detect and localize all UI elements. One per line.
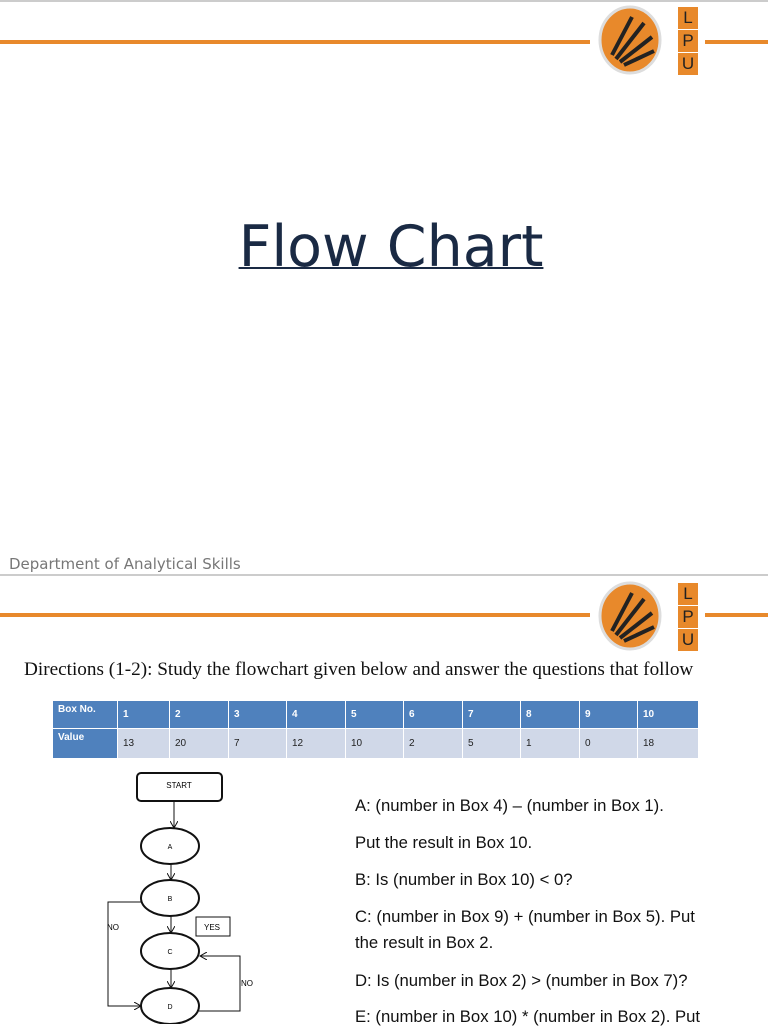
logo: P bbox=[682, 31, 694, 50]
data table: 10 bbox=[643, 709, 654, 720]
data table: 9 bbox=[585, 709, 591, 720]
logo: L bbox=[683, 584, 693, 603]
logo bbox=[598, 6, 698, 75]
flowchart: START bbox=[166, 781, 192, 790]
data table: Value bbox=[58, 732, 84, 743]
data table: 7 bbox=[468, 709, 474, 720]
data table: 18 bbox=[643, 738, 654, 749]
flowchart: B bbox=[168, 896, 173, 903]
data table: 13 bbox=[123, 738, 134, 749]
footer: Department of Analytical Skills bbox=[9, 555, 241, 573]
text: Put the result in Box 10. bbox=[355, 833, 532, 852]
data table: 10 bbox=[351, 738, 362, 749]
logo: U bbox=[682, 54, 694, 73]
data table: 1 bbox=[123, 709, 129, 720]
flowchart: D bbox=[167, 1004, 173, 1011]
data table: 8 bbox=[526, 709, 532, 720]
logo: P bbox=[682, 607, 694, 626]
data table: 12 bbox=[292, 738, 303, 749]
text: B: Is (number in Box 10) < 0? bbox=[355, 870, 573, 889]
logo: L bbox=[683, 8, 693, 27]
text: E: (number in Box 10) * (number in Box 2). Put bbox=[355, 1007, 700, 1026]
directions: Directions (1-2): Study the flowchart given below and answer the questions that follow bbox=[24, 659, 693, 680]
logo bbox=[598, 582, 698, 651]
data table: 0 bbox=[585, 738, 591, 749]
data table: 2 bbox=[409, 738, 415, 749]
flowchart: NO bbox=[107, 923, 119, 932]
text: C: (number in Box 9) + (number in Box 5). Put bbox=[355, 907, 695, 926]
text: A: (number in Box 4) – (number in Box 1). bbox=[355, 796, 664, 815]
flowchart: C bbox=[167, 949, 173, 956]
header line bbox=[0, 613, 590, 617]
title: Flow Chart bbox=[239, 214, 543, 280]
slide 2 bbox=[0, 574, 768, 1026]
flowchart: YES bbox=[204, 923, 220, 932]
header line bbox=[0, 40, 590, 44]
data table: 7 bbox=[234, 738, 240, 749]
data table: 5 bbox=[351, 709, 357, 720]
data table bbox=[53, 701, 698, 758]
data table: Box No. bbox=[58, 704, 96, 715]
data table: 6 bbox=[409, 709, 415, 720]
data table: 5 bbox=[468, 738, 474, 749]
data table: 1 bbox=[526, 738, 532, 749]
data table: 20 bbox=[175, 738, 186, 749]
text: D: Is (number in Box 2) > (number in Box 7)? bbox=[355, 971, 688, 990]
slide 1 bbox=[0, 0, 768, 577]
flowchart: A bbox=[168, 844, 173, 851]
logo: U bbox=[682, 630, 694, 649]
text: the result in Box 2. bbox=[355, 933, 493, 952]
flowchart: NO bbox=[241, 979, 253, 988]
data table: 2 bbox=[175, 709, 181, 720]
data table: 4 bbox=[292, 709, 298, 720]
questions bbox=[355, 796, 700, 1026]
data table: 3 bbox=[234, 709, 240, 720]
